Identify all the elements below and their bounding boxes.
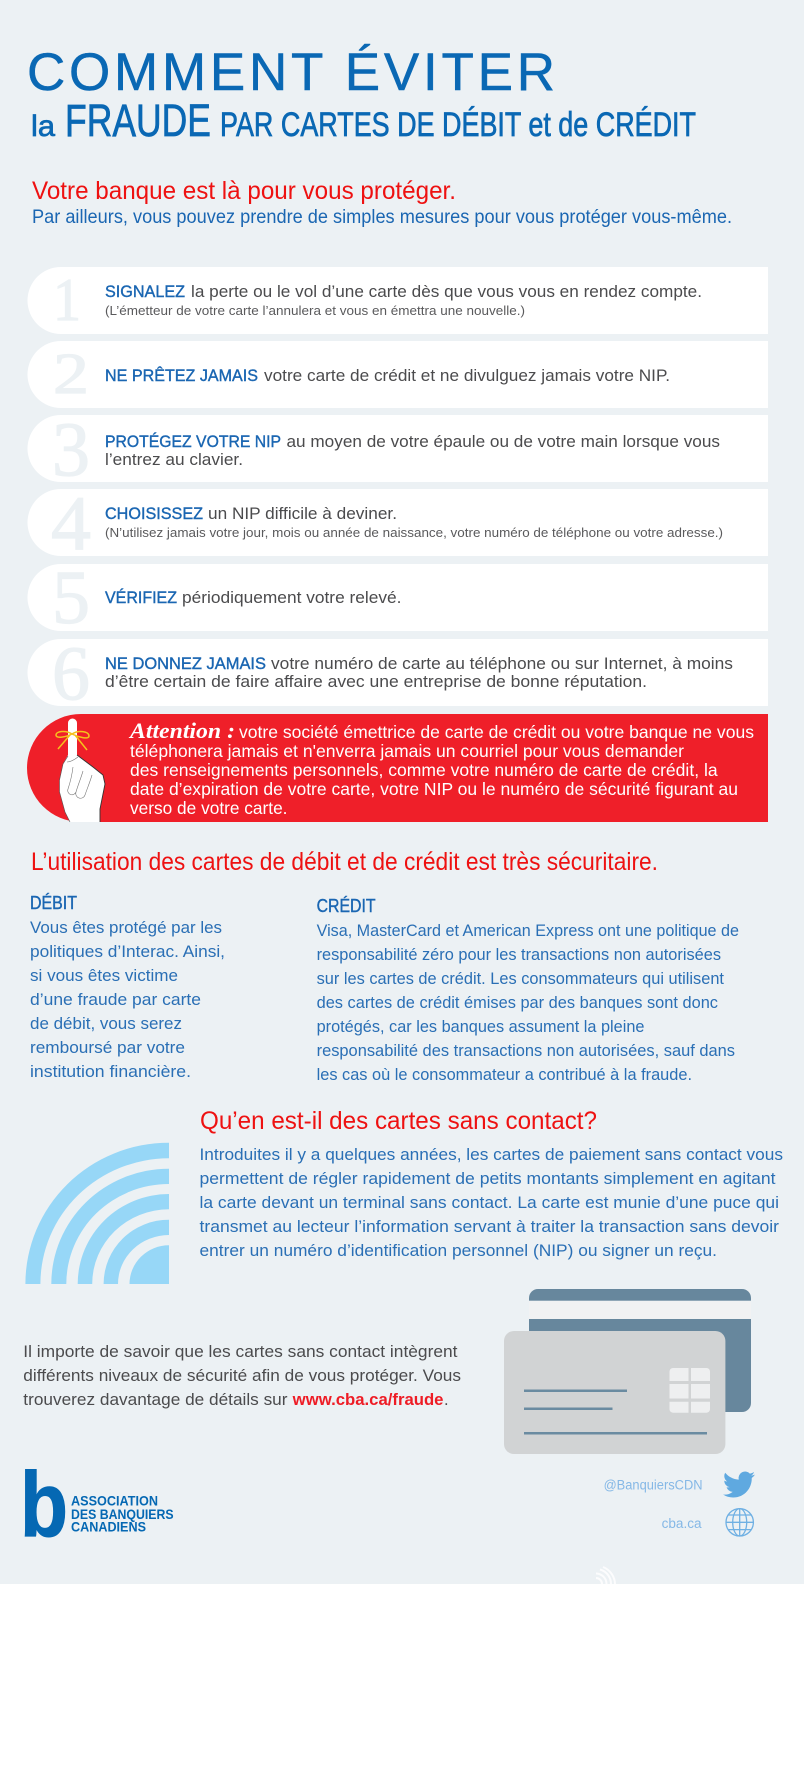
- panel: step 1: SIGNALEZ: [105, 282, 185, 301]
- title: la: [31, 110, 55, 143]
- heading: cartes sans contact: Qu’en est-il des cartes sans contact?: [200, 1107, 597, 1135]
- panel: step 5: [27, 556, 768, 640]
- title: COMMENT ÉVITER: [27, 43, 555, 102]
- panel: step 6: votre numéro de carte au téléphone ou sur Internet, à moins: [271, 654, 733, 673]
- text block: crédit: CRÉDIT: [317, 896, 376, 916]
- logo: association des banquiers canadiens: CANADIENS: [71, 1519, 146, 1535]
- panel: step 5: périodiquement votre relevé.: [182, 588, 402, 607]
- panel: step 1: la perte ou le vol d’une carte dès que vous vous en rendez compte.: [191, 282, 702, 301]
- text block: sécurité: Il importe de savoir que les cartes sans contact intègrent: [23, 1343, 458, 1361]
- panel: step 3: PROTÉGEZ VOTRE NIP: [105, 432, 281, 451]
- icon: contactless waves: [25, 1143, 169, 1284]
- panel: step 4: 4: [51, 480, 91, 566]
- text block: débit: si vous êtes victime: [30, 967, 178, 985]
- panel: step 3: [27, 406, 768, 492]
- panel: attention callout: date d’expiration de votre carte, votre NIP ou le numéro de sécurité figurant au: [130, 779, 738, 799]
- panel: step 2: NE PRÊTEZ JAMAIS: [105, 366, 258, 385]
- text block: débit: DÉBIT: [30, 893, 77, 913]
- icon: globe: [726, 1509, 753, 1536]
- panel: step 3: l’entrez au clavier.: [105, 450, 243, 469]
- panel: step 2: votre carte de crédit et ne divulguez jamais votre NIP.: [264, 366, 670, 385]
- text block: crédit: responsabilité zéro pour les transactions non autorisées: [317, 946, 721, 964]
- text block: sans contact: [200, 1146, 783, 1260]
- panel: step 6: NE DONNEZ JAMAIS: [105, 654, 266, 673]
- panel: attention callout: votre société émettrice de carte de crédit ou votre banque ne vous: [239, 722, 754, 742]
- twitter handle: @BanquiersCDN: [604, 1478, 703, 1493]
- panel: step 1: [27, 267, 768, 334]
- panel: attention callout: verso de votre carte.: [130, 798, 288, 818]
- text block: débit: de débit, vous serez: [30, 1015, 182, 1033]
- text block: crédit: [317, 896, 739, 1084]
- text block: sans contact: permettent de régler rapidement de petits montants simplement en agitant: [200, 1170, 776, 1188]
- logo: association des banquiers canadiens: ASSOCIATION: [71, 1493, 158, 1509]
- panel: step 3: au moyen de votre épaule ou de votre main lorsque vous: [286, 432, 720, 451]
- panel: step 6: 6: [52, 630, 90, 716]
- text block: sécurité: .: [444, 1391, 449, 1409]
- panel: step 4: (N’utilisez jamais votre jour, mois ou année de naissance, votre numéro de téléphone ou votre adresse.): [105, 526, 723, 540]
- text block: sécurité: [23, 1343, 461, 1409]
- panel: attention callout: des renseignements personnels, comme votre numéro de carte de crédit, la: [130, 760, 718, 780]
- logo: association des banquiers canadiens: [20, 1454, 174, 1556]
- panel: attention callout: Attention :: [128, 718, 235, 743]
- logo: association des banquiers canadiens: b: [20, 1454, 68, 1556]
- text block: crédit: responsabilité des transactions non autorisées, sauf dans: [317, 1042, 735, 1060]
- panel: step 5: VÉRIFIEZ: [105, 588, 177, 607]
- text block: débit: [30, 893, 225, 1081]
- panel: step 3: 3: [52, 406, 90, 492]
- website: cba.ca: [662, 1516, 702, 1531]
- text block: crédit: les cas où le consommateur a contribué à la fraude.: [317, 1066, 692, 1084]
- panel: step 4: CHOISISSEZ: [105, 504, 203, 523]
- icon: bank cards: [504, 1289, 751, 1454]
- panel: step 2: 2: [53, 341, 89, 406]
- text block: sans contact: Introduites il y a quelques années, les cartes de paiement sans contact vous: [200, 1146, 783, 1164]
- text block: sans contact: transmet au lecteur l’information servant à traiter la transaction sans devoir: [200, 1218, 780, 1236]
- title: FRAUDE: [65, 95, 211, 146]
- icon: hand with ribbon on finger: [56, 719, 105, 822]
- icon: small white waves: [596, 1567, 615, 1584]
- panel: step 2: [27, 341, 768, 408]
- text block: sécurité: différents niveaux de sécurité afin de vous protéger. Vous: [23, 1367, 461, 1385]
- text block: crédit: sur les cartes de crédit. Les consommateurs qui utilisent: [317, 970, 724, 988]
- text block: crédit: des cartes de crédit émises par des banques sont donc: [317, 994, 718, 1012]
- panel: step 6: [27, 630, 768, 716]
- icon: twitter bird: [723, 1472, 755, 1497]
- text block: débit: institution financière.: [30, 1063, 191, 1081]
- panel: step 1: 1: [53, 267, 81, 333]
- text block: sécurité: trouverez davantage de détails sur: [23, 1391, 288, 1409]
- logo: association des banquiers canadiens: DES BANQUIERS: [71, 1506, 174, 1522]
- subtitle: votre banque: Votre banque est là pour vous protéger.: [32, 177, 456, 205]
- text block: débit: d’une fraude par carte: [30, 991, 201, 1009]
- text block: crédit: Visa, MasterCard et American Express ont une politique de: [317, 922, 739, 940]
- subtitle: votre banque: [32, 177, 732, 228]
- subtitle: votre banque: Par ailleurs, vous pouvez prendre de simples mesures pour vous protéger vous-même.: [32, 207, 732, 228]
- panel: attention callout: téléphonera jamais et n'enverra jamais un courriel pour vous demander: [130, 741, 684, 761]
- text block: débit: politiques d’Interac. Ainsi,: [30, 943, 225, 961]
- panel: step 1: (L’émetteur de votre carte l’annulera et vous en émettra une nouvelle.): [105, 304, 525, 318]
- heading: sécuritaire: L’utilisation des cartes de débit et de crédit est très sécuritaire.: [31, 848, 658, 876]
- text block: débit: remboursé par votre: [30, 1039, 185, 1057]
- text block: débit: Vous êtes protégé par les: [30, 919, 222, 937]
- text block: sans contact: entrer un numéro d’identification personnel (NIP) ou signer un reçu.: [200, 1242, 717, 1260]
- panel: step 4: [27, 480, 768, 566]
- panel: step 6: d’être certain de faire affaire avec une entreprise de bonne réputation.: [105, 672, 647, 691]
- text block: sans contact: la carte devant un terminal sans contact. La carte est munie d’une puce qui: [200, 1194, 779, 1212]
- text block: sécurité: www.cba.ca/fraude: [292, 1391, 444, 1409]
- title: PAR CARTES DE DÉBIT et de CRÉDIT: [220, 106, 696, 144]
- panel: step 4: un NIP difficile à deviner.: [208, 504, 397, 523]
- panel: attention callout: [27, 714, 768, 822]
- title: [27, 43, 696, 146]
- text block: crédit: protégés, car les banques assument la pleine: [317, 1018, 644, 1036]
- panel: step 5: 5: [52, 556, 90, 640]
